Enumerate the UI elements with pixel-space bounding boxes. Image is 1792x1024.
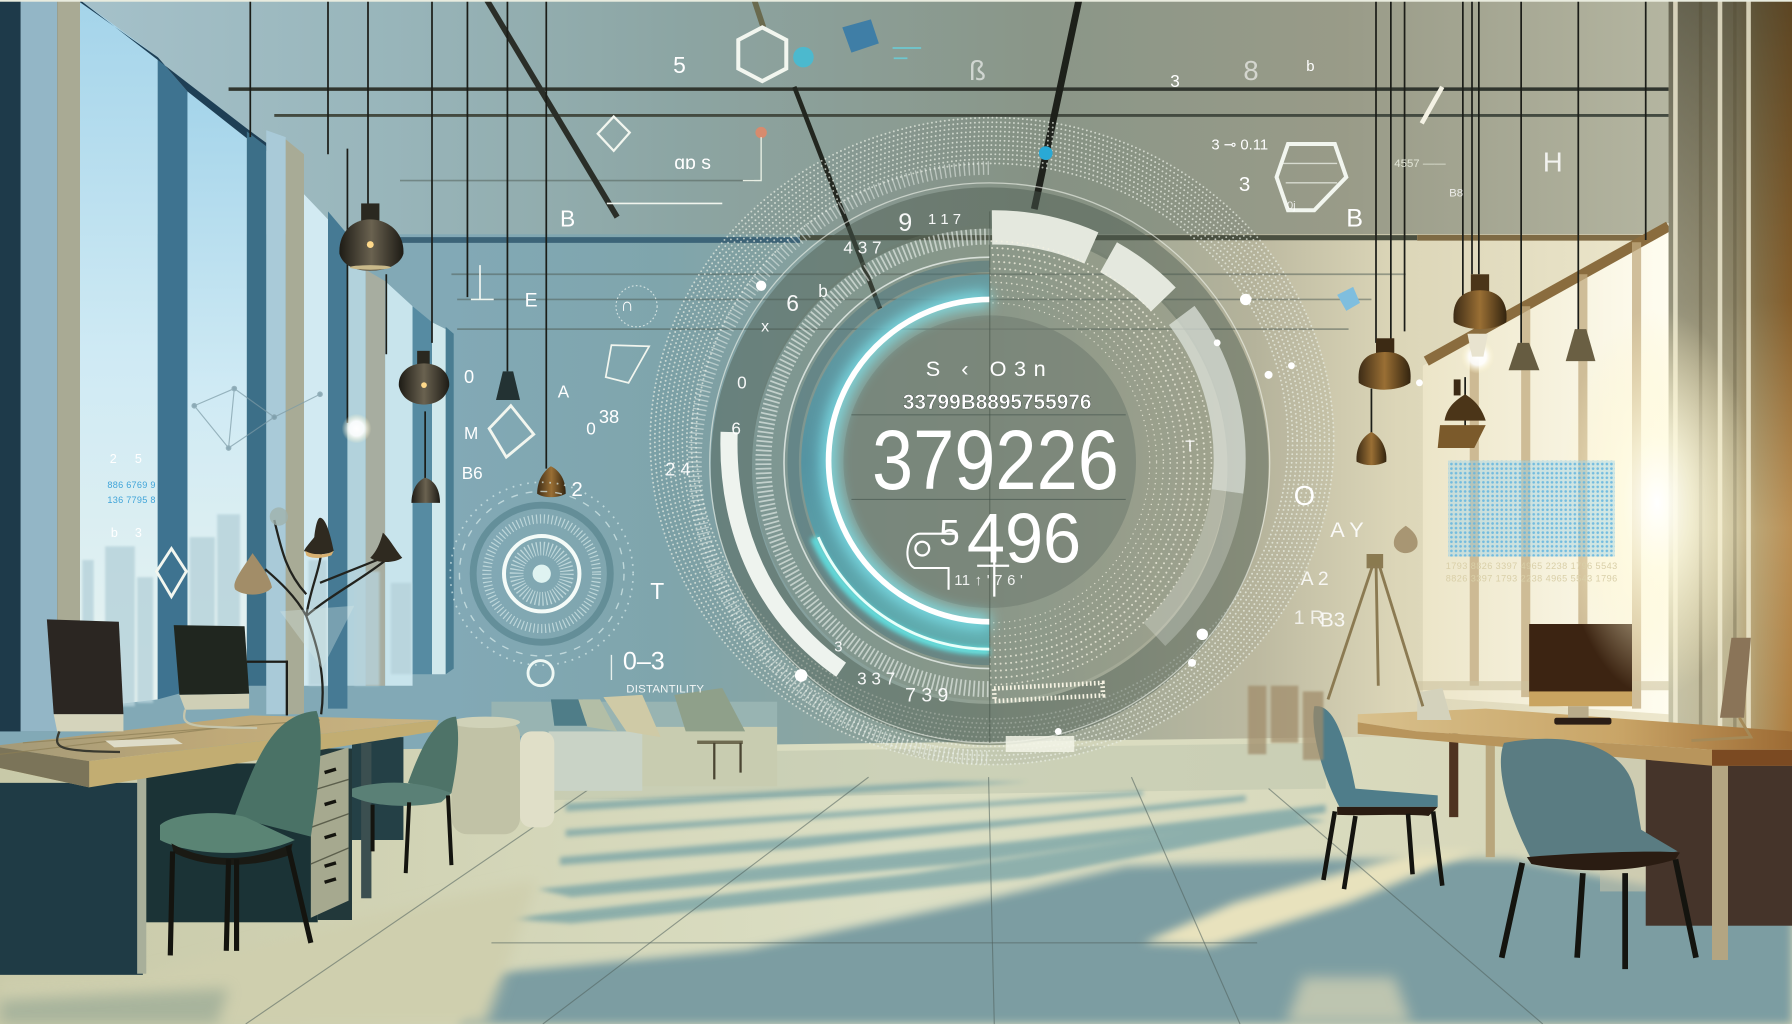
floating glyphs: 0 [586,418,596,438]
floating glyphs: 38 [599,406,619,427]
floating glyphs: ß [969,55,986,86]
floating glyphs: 4557 —— [1394,158,1446,170]
chairs: right [1313,706,1696,969]
floating glyphs: 0–3 [623,648,665,676]
floating glyphs: b [1306,59,1315,75]
floating glyphs: B8 [1449,188,1463,200]
floating glyphs: 2 [110,452,117,466]
dial: orbit numbers: 7 3 9 [905,685,948,707]
dial: teal band [801,274,990,651]
floating glyphs: 1 R [1294,607,1324,629]
lamp [399,351,449,405]
floating glyphs: 3 [1170,71,1180,91]
floating glyphs: 2 [571,478,583,501]
dial: big number: 379226 [872,412,1119,507]
window shadow streaks [503,782,1326,923]
tripod [1328,555,1423,706]
dial: orbit numbers: 4 3 7 [843,238,882,258]
dial: orbit numbers: 3 [834,639,843,655]
dial: orbit numbers: b [818,281,828,301]
floating glyphs: b [111,526,118,540]
dial: bright nodes [756,281,1295,735]
floating glyphs: DISTANTILITY [626,684,704,696]
large floor shadow [457,859,1792,1024]
floating glyphs: 0 [464,366,474,387]
chair near [160,711,321,955]
blue data panel: 1793 8826 3397 4965 2238 1796 5543 [1446,561,1617,571]
floating glyphs: 886 6769 9 [107,480,155,490]
desk: left [0,715,439,975]
hexagon top [738,27,786,81]
blue data panel: 8826 3397 1793 2238 4965 5543 1796 [1446,574,1617,584]
dial: data lines [851,415,1126,499]
dial: cyan glow arc [814,299,990,651]
floating glyphs: ∩ [621,294,634,315]
lamp [537,466,566,497]
floating glyphs: 3 [1239,173,1250,196]
hanging wires [250,0,1646,480]
molecule sketch in window [192,386,322,450]
diamond window [157,549,186,597]
dial: vertical seam [989,211,991,743]
dial: orbit numbers: 1 1 7 [928,212,961,228]
floating glyphs [107,52,1563,696]
chair large [1501,739,1696,969]
left windows [0,0,454,731]
dial: orbit numbers: T [1185,438,1195,455]
dial: right dotted ring [990,240,1212,686]
dial: long number: 33799B8895755976 [903,391,1091,414]
dial: orbit numbers: x [761,318,769,335]
floating glyphs: M [464,423,478,443]
lamp [1438,379,1486,448]
chair small [1313,706,1442,889]
dial: blue node [1039,146,1053,160]
dial: orbit numbers: 6 [786,290,799,316]
dial: orbit numbers [665,209,1195,707]
polygon [606,345,649,383]
floating glyphs: B [560,205,575,231]
floating glyphs: ɑɒ s [674,152,711,174]
dial: second number: 496 [967,499,1081,578]
floating glyphs: H [1543,146,1563,177]
floating glyphs: 3 [135,526,142,540]
city skyline [82,514,411,709]
floating glyphs: 5 [135,452,142,466]
dial: orbit numbers: 3 3 7 [857,669,895,689]
round poufs [451,717,554,834]
background lounge chairs [1248,686,1323,760]
chairs: left [160,711,458,955]
dial: tiny labels: 11 ↑ ' 7 6 ' [954,573,1023,589]
background: ceiling [0,0,1792,274]
lamp [1453,274,1507,329]
dial: inner disc [752,225,1227,701]
lamp [1359,338,1411,390]
floating glyphs: 8 [1243,55,1259,86]
diamond top [598,117,630,151]
floating dots and cubes [743,19,1423,386]
sun glare [1560,309,1754,697]
right windows with sunlight [1417,223,1669,714]
floating glyphs: B3 [1320,608,1345,631]
lamp glow [342,414,371,443]
lamp [1566,329,1595,361]
dial: dark middle band [731,208,1248,725]
floating glyphs: T [650,578,664,604]
diamond left [489,406,534,457]
lounge sofa [491,688,777,791]
lamp [339,203,403,271]
dial: bottom barcode [994,683,1103,701]
sofa reflection tone [549,743,1326,800]
lamp [411,478,440,503]
dial: orbit numbers: 2 4 [665,458,691,479]
tree lamp with glass shades [234,507,402,715]
lamp [1461,334,1495,374]
dial: orbit numbers: 0 [737,373,747,393]
floating glyphs: B6 [462,463,483,483]
floating glyphs: 136 7795 8 [107,495,155,505]
lamp [1394,526,1418,553]
dial: outer thin ring [710,183,1270,743]
dial: center window [843,315,1136,608]
main holographic dial [650,118,1334,765]
pendant lamps: left [339,203,566,503]
floating glyphs: 0j [1287,200,1296,212]
lamp [1356,432,1386,465]
floating glyphs: A Y [1330,517,1364,542]
dial: second number: 5 [939,512,960,553]
dial: small number 1: S ‹ O3n [926,356,1046,381]
floating glyphs: 3 ⊸ 0.11 [1211,138,1268,154]
floating glyphs: 5 [673,52,686,78]
floating glyphs: A [558,382,570,402]
desk: right [1358,624,1792,960]
floating shapes [157,27,1346,597]
hexagon right [1277,144,1346,210]
floor [0,731,1792,1024]
monitor right [1417,624,1751,741]
drawer unit [311,747,349,918]
lamp [1509,343,1539,370]
dial: outer dotted halo [650,118,1334,765]
small target dial [450,482,633,686]
dial: orbit numbers: 6 [731,418,741,438]
floating glyphs: O [1294,480,1315,511]
chair far [352,717,458,873]
dial: left striated ring [688,161,990,764]
top edge highlight [0,0,1792,2]
dial: second number [907,499,1081,597]
floating glyphs: B [1346,204,1363,232]
floating glyphs: E [525,289,538,311]
ceiling beams and rails [229,0,1669,329]
dial: white segments top right [992,227,1230,744]
monitors: left [47,619,257,752]
background: back wall [0,234,1792,760]
dial: orbit numbers: 9 [898,209,912,237]
dial: white segment left [729,432,841,670]
pendant lamps: right [1356,274,1595,553]
blue data panel [1446,461,1617,584]
lamp [496,371,520,400]
floating glyphs: A 2 [1301,568,1329,590]
curtains on right [1669,0,1792,754]
